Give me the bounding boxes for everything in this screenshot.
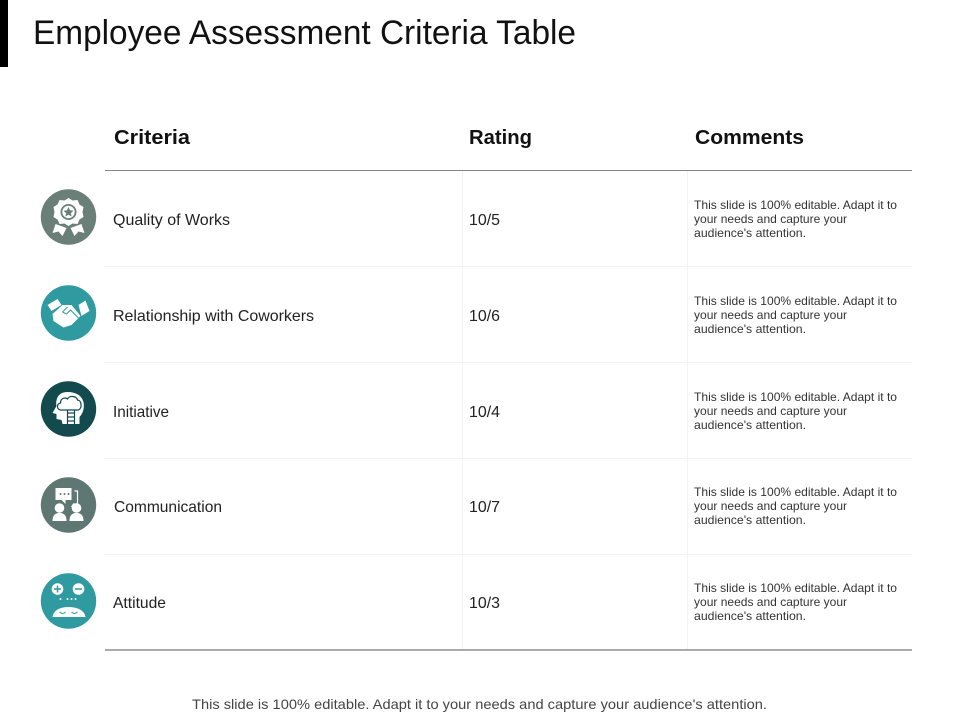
row: quality of works — [41, 189, 897, 245]
row: relationship with coworkers: audience's attention. — [694, 322, 806, 336]
row: relationship with coworkers — [41, 285, 897, 341]
row: initiative: audience's attention. — [694, 418, 806, 432]
header row — [114, 127, 804, 149]
row: communication: your needs and capture your — [694, 499, 847, 513]
row: communication: audience's attention. — [694, 513, 806, 527]
row: initiative: Initiative — [113, 404, 169, 421]
row: quality of works: This slide is 100% editable. Adapt it to — [694, 198, 897, 212]
row: quality of works: 10/5 — [469, 212, 500, 229]
row: communication — [41, 477, 897, 533]
row: relationship with coworkers: 10/6 — [469, 308, 500, 325]
row: attitude — [41, 573, 897, 629]
footer note: This slide is 100% editable. Adapt it to your needs and capture your audience's attention. — [192, 696, 767, 712]
row: relationship with coworkers: This slide is 100% editable. Adapt it to — [694, 294, 897, 308]
icon: rosette award — [41, 189, 96, 245]
header row: Rating — [469, 127, 532, 149]
row: communication: Communication — [114, 499, 222, 516]
header row: Criteria — [114, 127, 191, 149]
row: initiative: your needs and capture your — [694, 404, 847, 418]
row: initiative — [41, 381, 897, 437]
row: quality of works: audience's attention. — [694, 226, 806, 240]
row: initiative: This slide is 100% editable. Adapt it to — [694, 390, 897, 404]
row: relationship with coworkers: your needs and capture your — [694, 308, 847, 322]
row: quality of works: your needs and capture your — [694, 212, 847, 226]
row: attitude: This slide is 100% editable. Adapt it to — [694, 581, 897, 595]
row: communication: This slide is 100% editable. Adapt it to — [694, 485, 897, 499]
header row: Comments — [695, 127, 804, 149]
row: communication: 10/7 — [469, 499, 500, 516]
row: attitude: 10/3 — [469, 595, 500, 612]
row: attitude: audience's attention. — [694, 609, 806, 623]
accent bar — [0, 0, 8, 67]
row: attitude: Attitude — [113, 595, 166, 612]
icon: positive and negative attitude — [41, 573, 96, 629]
icon: two people talking — [41, 477, 96, 533]
table — [41, 127, 912, 650]
title: Employee Assessment Criteria Table — [33, 14, 576, 52]
row: relationship with coworkers: Relationship with Coworkers — [113, 308, 314, 325]
row: attitude: your needs and capture your — [694, 595, 847, 609]
row: initiative: 10/4 — [469, 404, 500, 421]
row: quality of works: Quality of Works — [113, 212, 230, 229]
icon: handshake — [41, 285, 96, 341]
icon: head with cloud and ladder — [41, 381, 96, 437]
